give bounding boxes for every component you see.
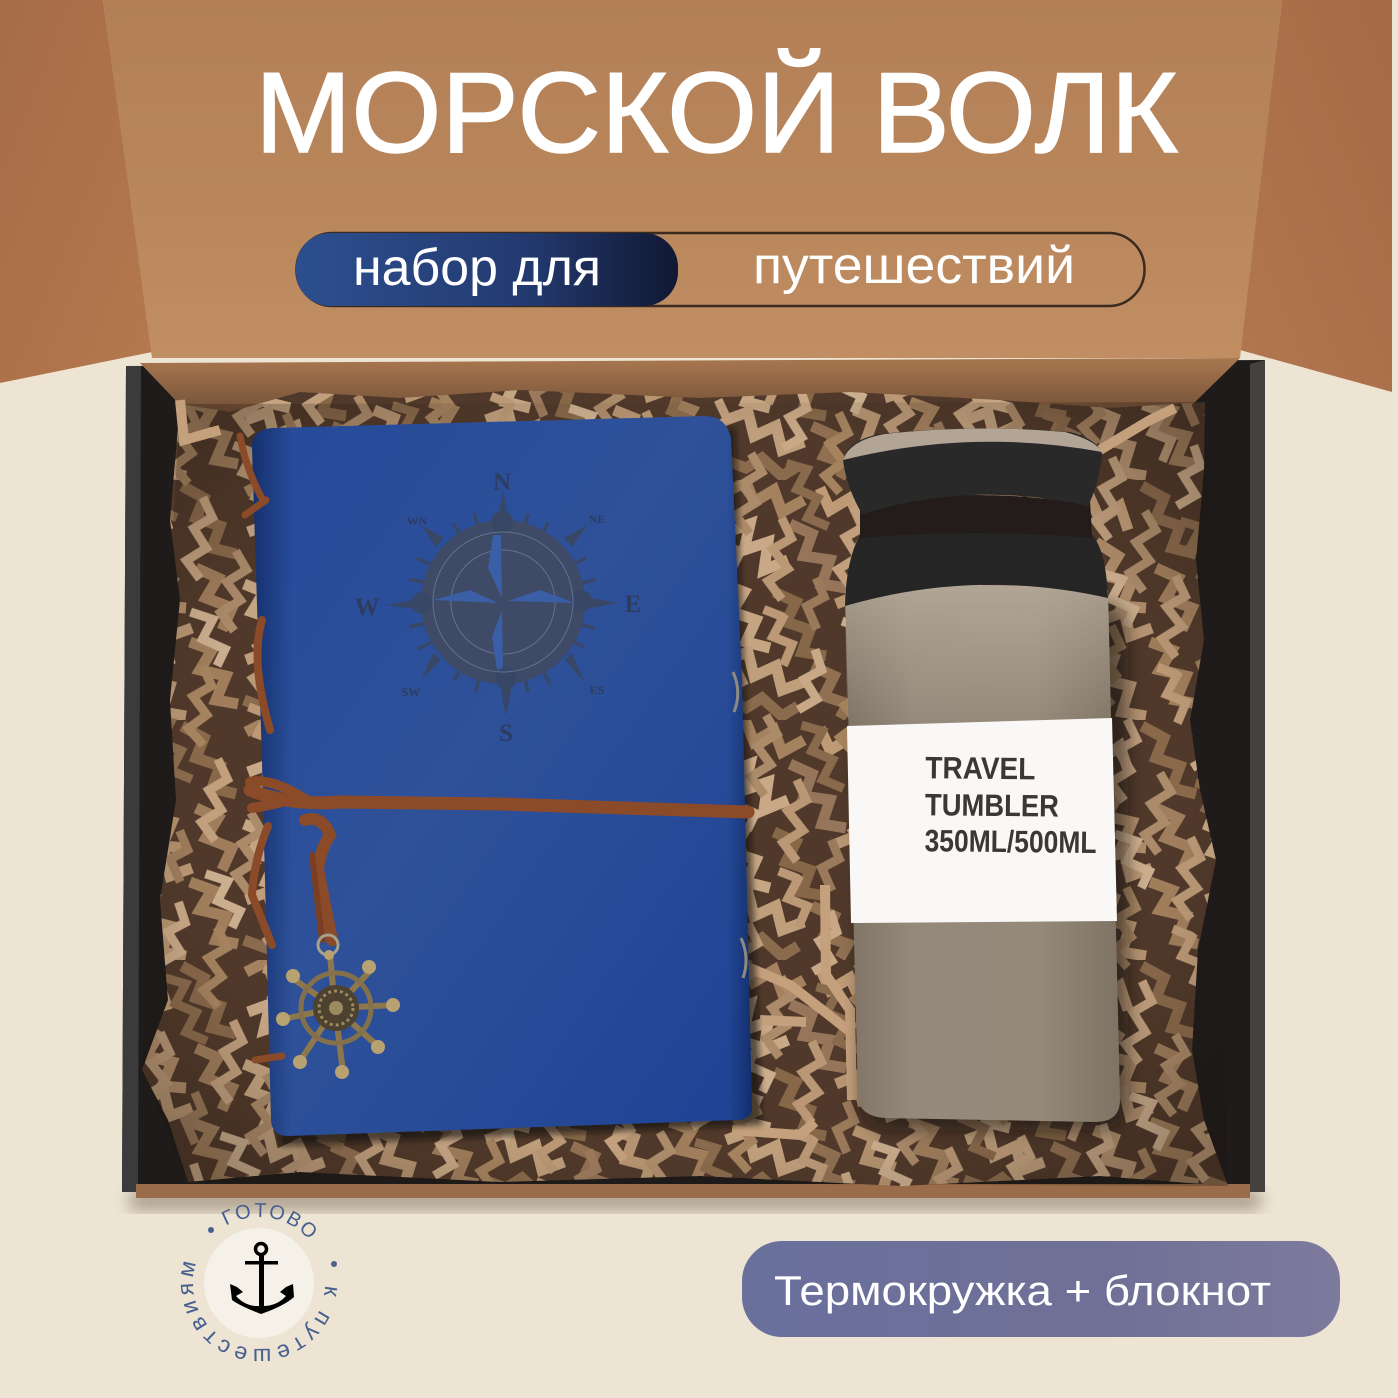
badge circular text <box>180 1203 338 1362</box>
tumbler <box>843 428 1128 1130</box>
badge circular text: ГОТОВО <box>222 1203 316 1237</box>
compass direction letters: E <box>625 591 641 618</box>
tumbler label text <box>924 750 1098 860</box>
tumbler neck band <box>860 495 1092 538</box>
box shadow <box>130 1190 1260 1210</box>
compass direction letters: NE <box>589 512 605 526</box>
subtitle pill: набор для <box>353 239 601 297</box>
tumbler label text: TUMBLER <box>925 787 1059 824</box>
notebook cover <box>252 416 752 1136</box>
notebook side rings <box>733 672 746 978</box>
icon: anchor <box>230 1244 294 1314</box>
compass direction letters <box>354 469 641 747</box>
compass direction letters: N <box>493 469 511 496</box>
crinkle paper filler <box>142 390 1228 1186</box>
compass direction letters: W <box>354 594 380 621</box>
compass direction letters: WN <box>407 514 428 528</box>
compass rose emboss <box>354 469 641 747</box>
badge center disc <box>204 1228 314 1338</box>
compass direction letters: SW <box>402 685 420 699</box>
tumbler cap <box>843 428 1102 514</box>
notebook <box>240 416 762 1146</box>
subtitle pill: путешествий <box>753 237 1075 295</box>
open box lid <box>0 0 1392 392</box>
tumbler shadow <box>860 600 1128 1130</box>
tumbler label text: 350ML/500ML <box>924 823 1097 860</box>
round badge <box>180 1203 338 1362</box>
contents pill: Термокружка + блокнот <box>774 1267 1271 1314</box>
kraft gift box <box>122 358 1265 1198</box>
tumbler label text: TRAVEL <box>925 750 1036 786</box>
badge circular text: к путешествиям <box>180 1262 338 1362</box>
tumbler body <box>845 585 1120 1122</box>
contents pill <box>742 1241 1340 1337</box>
subtitle pill <box>296 233 1144 306</box>
notebook shadow <box>262 428 762 1146</box>
leather cord <box>240 436 748 1060</box>
ship wheel charm <box>276 935 400 1079</box>
tumbler white label <box>847 718 1117 923</box>
compass direction letters: ES <box>590 683 605 697</box>
compass direction letters: S <box>499 720 513 747</box>
title: МОРСКОЙ ВОЛК <box>255 49 1178 177</box>
tumbler shoulder band <box>845 500 1108 606</box>
